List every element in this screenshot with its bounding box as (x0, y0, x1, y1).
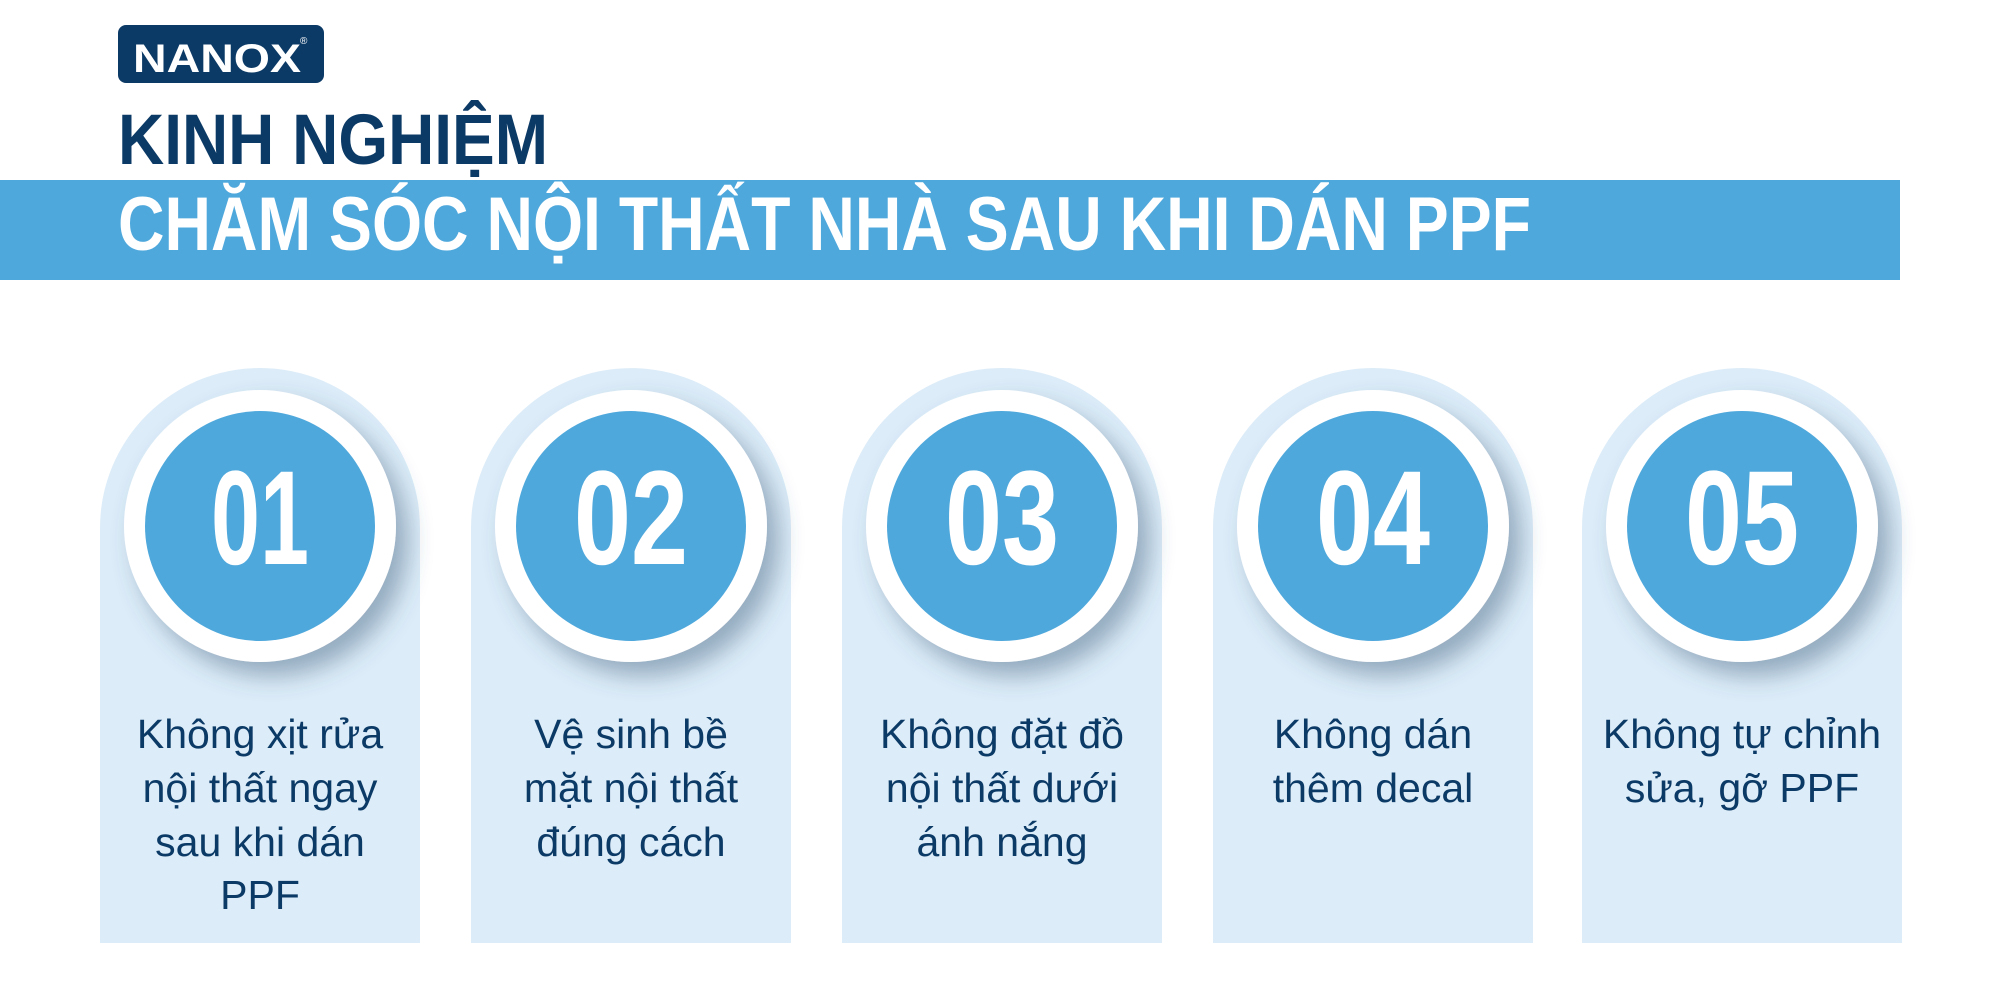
panel: card 01: PPF (220, 872, 300, 918)
panel: card 04: 04 (1316, 444, 1430, 593)
panel: card 05: 05 (1685, 444, 1799, 593)
panel: card 02: Vệ sinh bề (534, 711, 728, 757)
panel: card 04: Không dán (1274, 711, 1472, 757)
panel: card 02 (471, 368, 791, 943)
title band: CHĂM SÓC NỘI THẤT NHÀ SAU KHI DÁN PPF (118, 182, 1531, 267)
panel: card 03: 03 (945, 444, 1059, 593)
panel: card 03: Không đặt đồ (880, 711, 1124, 757)
panel: card 01: nội thất ngay (143, 765, 378, 811)
panel: card 02: đúng cách (536, 819, 726, 865)
panel: card 03 (842, 368, 1162, 943)
panel: card 03: ánh nắng (916, 819, 1088, 865)
panel: card 01: Không xịt rửa (137, 711, 383, 757)
panel: card 05: Không tự chỉnh (1603, 711, 1881, 757)
panel: card 02: 02 (574, 444, 688, 593)
panel: card 01: 01 (211, 444, 309, 593)
panel: card 02: mặt nội thất (524, 765, 739, 811)
panel: card 05: sửa, gỡ PPF (1625, 765, 1859, 811)
logo: NANOX: NANOX (133, 37, 301, 81)
panel: card 01 (100, 368, 420, 943)
panel: card 03: nội thất dưới (886, 765, 1118, 811)
panel: card 04: thêm decal (1273, 765, 1473, 811)
logo: NANOX (118, 25, 324, 83)
panel: card 04 (1213, 368, 1533, 943)
title: KINH NGHIỆM: KINH NGHIỆM (118, 100, 548, 180)
panel: card 05 (1582, 368, 1902, 943)
panel: card 01: sau khi dán (155, 819, 365, 865)
logo: NANOX: ® (300, 36, 308, 47)
